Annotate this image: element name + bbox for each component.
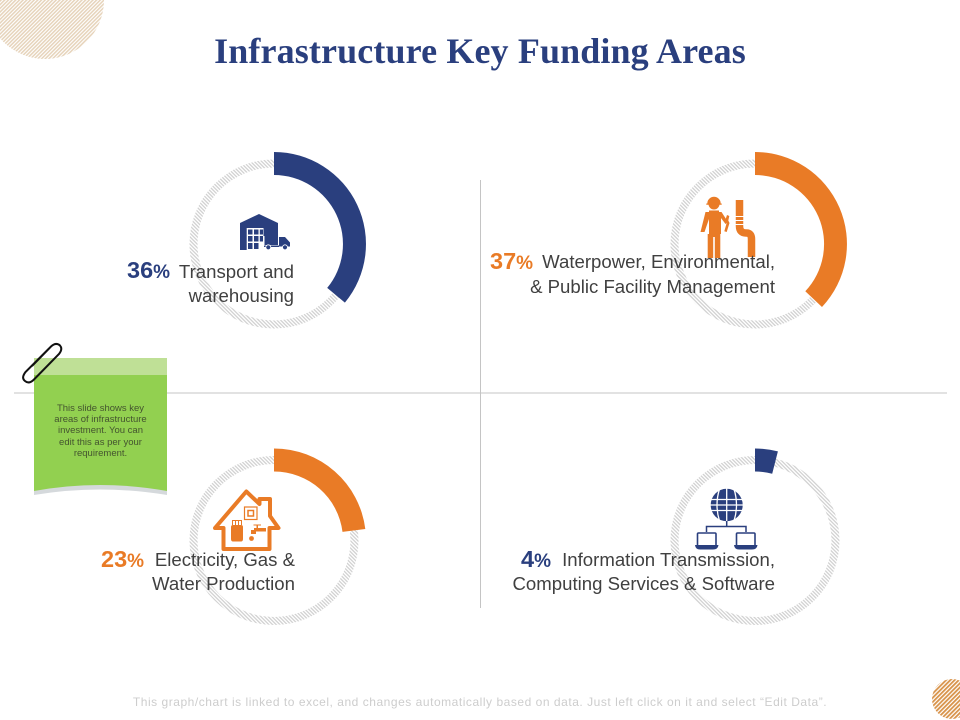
icon: worker and pipe [700, 197, 752, 258]
value and label: Computing Services & Software [512, 573, 775, 594]
value and label: Water Production [152, 573, 295, 594]
value and label [490, 248, 776, 297]
donut arc 36% [274, 152, 366, 303]
icon: house with utilities [215, 492, 278, 549]
value and label [127, 257, 294, 306]
note text: requirement. [74, 448, 127, 459]
note text: investment. You can [58, 425, 143, 436]
icon: paper clip [23, 344, 61, 382]
footer note: This graph/chart is linked to excel, and changes automatically based on data. Just left click on it and select “Edit Data”. [133, 695, 827, 709]
note text: edit this as per your [59, 437, 142, 448]
value and label: 23% [101, 546, 144, 572]
value and label: Waterpower, Environmental, [542, 251, 775, 272]
note top band [34, 358, 167, 375]
value and label [512, 546, 775, 594]
panel: electricity, gas and water production [101, 448, 365, 625]
value and label: warehousing [188, 285, 294, 306]
note text: areas of infrastructure [54, 414, 147, 425]
value and label: Transport and [179, 261, 294, 282]
value and label: & Public Facility Management [530, 276, 776, 297]
donut track [670, 160, 840, 328]
decorative corner circle: top left [0, 0, 104, 59]
value and label: 36% [127, 257, 170, 283]
value and label: 4% [521, 546, 551, 572]
value and label: 37% [490, 248, 533, 274]
donut track [190, 160, 358, 328]
icon: warehouse and truck [240, 214, 290, 250]
donut arc 4% [755, 448, 778, 474]
donut track [190, 456, 358, 625]
value and label: Electricity, Gas & [155, 549, 296, 570]
note text: This slide shows key [57, 403, 144, 414]
panel: information transmission, computing and software [512, 448, 840, 625]
value and label [101, 546, 296, 594]
panel: waterpower, environmental and public facility [490, 152, 847, 328]
donut arc 37% [755, 152, 847, 307]
donut track [670, 456, 840, 625]
panel: transport and warehousing [127, 152, 366, 328]
value and label: Information Transmission, [562, 549, 775, 570]
icon: globe network [695, 488, 758, 550]
note text [54, 403, 147, 459]
note body [34, 358, 167, 491]
decorative corner circle: bottom right [932, 679, 960, 719]
sticky note [23, 344, 167, 495]
note shadow [34, 484, 167, 495]
donut arc 23% [274, 448, 365, 532]
title: Infrastructure Key Funding Areas [214, 31, 746, 71]
